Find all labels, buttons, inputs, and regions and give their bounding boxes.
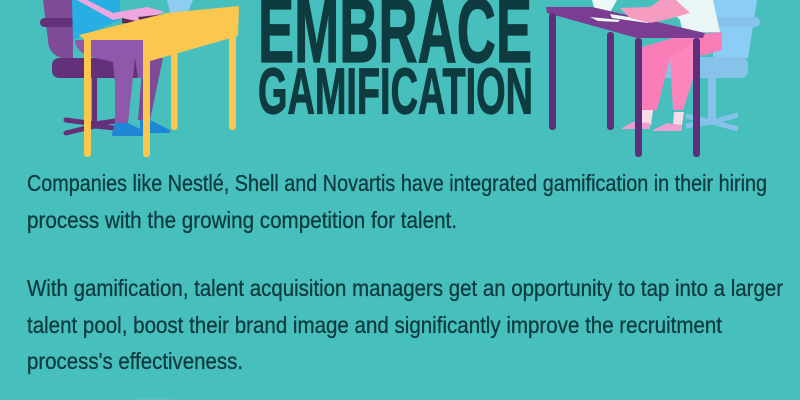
laptop: [165, 0, 194, 23]
illustration: woman at yellow desk: [40, 0, 239, 157]
illustration: woman at purple desk: [546, 0, 760, 157]
keyboard and hands: [590, 0, 690, 23]
person: [622, 0, 722, 131]
title line 2: GAMIFICATION: [258, 54, 533, 128]
paragraph 2: process's effectiveness.: [27, 348, 243, 374]
paragraph 1: [27, 170, 767, 233]
office chair: [40, 0, 142, 133]
yellow desk: [79, 6, 239, 157]
purple desk: [546, 7, 705, 157]
person: [72, 0, 175, 136]
paragraph 2: talent pool, boost their brand image and significantly improve the recruitment: [27, 312, 723, 338]
title: [258, 0, 533, 128]
paragraph 2: [27, 275, 783, 374]
faint graphic at bottom edge: [136, 398, 174, 400]
paragraph 1: process with the growing competition for talent.: [27, 207, 457, 233]
computer: [590, 0, 620, 22]
office chair: [658, 0, 760, 129]
